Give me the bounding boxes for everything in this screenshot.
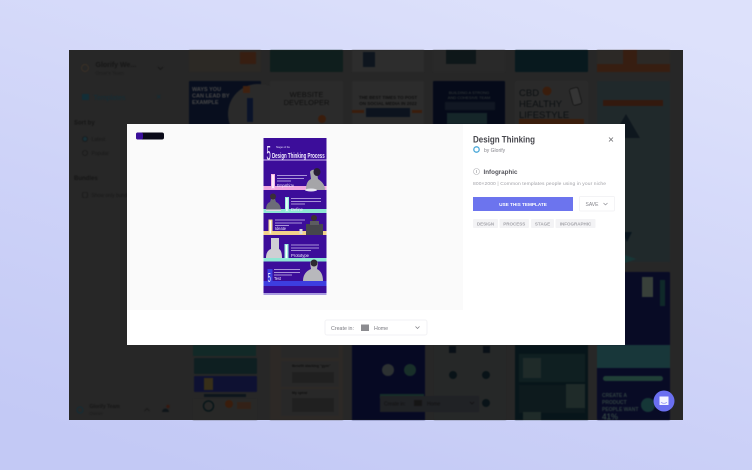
thumbnail row 2: LIFESTYLE [519,110,569,121]
stage 3: ideate [264,215,326,235]
thumbnail row 2: THE BEST TIMES TO POST [359,95,417,100]
format row [474,168,518,176]
thumbnail row 1 [189,50,670,72]
close icon [609,138,613,142]
thumbnail row 2: ON SOCIAL MEDIA IN 2022 [359,101,417,106]
sort by filter: Latest [92,137,106,143]
thumbnail row 2: BUILDING A STRONG [449,90,489,95]
stage 2: define [264,194,326,213]
thumbnails below modal column 2: My spiral [292,391,307,395]
template thumbnails grid [189,50,670,422]
format description: 800×2000 | Common templates people using in your niche [473,181,606,187]
infographic header: Stages of the [276,145,290,149]
infographic header: 5 [266,143,271,165]
thumbnails below modal column 2 [270,345,343,420]
stage 3: ideate: Ideate [275,226,286,231]
thumbnail row 2: WEBSITE [290,90,323,99]
workspace selector: Glorify We... [96,62,136,69]
bundles filter: Show only bundles [92,193,134,199]
template title: Design Thinking [473,134,535,144]
thumbnails below modal column 6 [597,272,670,422]
tag chips [473,219,596,228]
thumbnails below modal column 3 [352,345,425,420]
thumbnails below modal column 5 [515,345,588,420]
team account footer: Glorify Team [90,404,120,410]
stage 2: define: Define [291,207,303,212]
create-in selector [325,320,427,335]
use this template button: USE THIS TEMPLATE [499,202,547,207]
tag: stage: STAGE [535,222,550,226]
sort by filter [74,120,109,157]
thumbnail row 2: EXAMPLE [192,100,219,106]
tag: process: PROCESS [503,222,525,226]
dimmed create-in bar behind modal: Home [427,402,441,408]
stage 5: test: Test [274,276,282,281]
templates menu item [82,94,160,102]
thumbnails below modal column 6: PRODUCT [602,400,627,406]
sort by filter: Popular [92,151,109,157]
thumbnails below modal column 2: Benefit stacking "gym" [292,364,331,368]
tag: design: DESIGN [477,222,494,226]
infographic preview: design thinking [264,138,326,295]
dimmed create-in bar behind modal [380,396,479,412]
stage 1: empathize: Empathize [277,183,294,188]
save button: SAVE [586,202,599,208]
workspace selector: Omar's Team [96,70,124,76]
thumbnail row 2: CBD [519,88,539,99]
thumbnails below modal column 4 [434,345,506,420]
infographic header: Design Thinking Process [272,153,325,161]
thumbnails below modal column 6: PEOPLE WANT [602,407,638,413]
thumbnail row 2: DEVELOPER [284,98,330,107]
modal scrim over app window [69,50,683,420]
thumbnails below modal column 1 [193,345,257,420]
create-in selector: Home [374,326,388,332]
workspace selector [82,62,163,76]
stage 5: test [264,260,326,286]
author: by Glorify [484,148,506,154]
templates menu item: Templates [94,95,126,102]
save button [580,196,614,211]
team account footer [77,404,170,416]
dimmed app window [69,50,683,422]
use this template button [473,197,573,211]
sort by filter: Sort by [74,120,95,126]
infographic header [264,143,326,165]
bundles filter: Bundles [74,176,98,182]
format row: Infographic [484,169,518,176]
thumbnails below modal column 6: 41% [602,412,618,422]
bundles filter [74,176,134,199]
thumbnail row 2: CAN LEAD BY [192,94,230,100]
stage 4: prototype [264,238,326,262]
author [474,147,506,154]
thumbnail row 2: WAYS YOU [192,87,221,93]
preview pane [127,124,463,310]
template preview modal [127,124,625,345]
chat help button [654,390,674,412]
thumbnail row 2: HEALTHY [519,99,563,110]
stage 4: prototype: Prototype [291,253,309,258]
team account footer: Owner [90,411,103,416]
sidebar: workspace and filters [74,62,170,416]
stage 5: test: 5 [268,272,271,286]
create-in selector: Create in: [331,326,354,332]
template badge [136,132,164,140]
thumbnails below modal column 6: CREATE A [602,393,627,399]
thumbnail row 2: AND COHESIVE TEAM [448,95,490,100]
dimmed create-in bar behind modal: Create in: [384,402,406,408]
tag: infographic: INFOGRAPHIC [560,222,592,226]
thumbnail row 2 [189,81,670,263]
stage 1: empathize [264,168,326,192]
